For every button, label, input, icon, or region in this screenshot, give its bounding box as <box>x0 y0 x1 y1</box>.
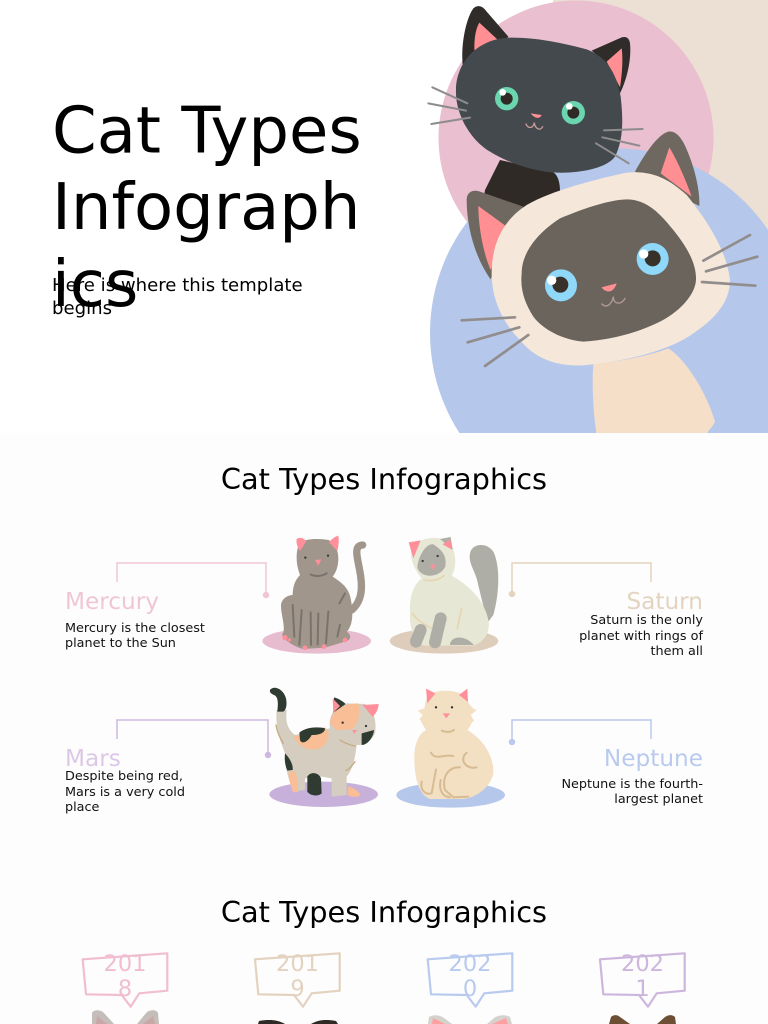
title: Infograph <box>52 171 360 245</box>
label: Mercury: Mercury <box>65 588 159 615</box>
text: Saturn description: Saturn is the only <box>590 613 703 628</box>
text: Mars description: Despite being red, <box>65 769 183 784</box>
blue circle <box>430 148 768 433</box>
connector: Neptune <box>510 720 651 744</box>
label: Mars: Mars <box>65 745 121 772</box>
year bubble: 2019 <box>255 951 340 1007</box>
connector: Mercury <box>117 563 268 598</box>
year bubble: 2020: 0 <box>463 976 477 1002</box>
text: Saturn description: planet with rings of <box>579 629 703 644</box>
connector: Saturn <box>510 563 651 596</box>
black cat <box>428 6 643 213</box>
title: Cat Types <box>52 94 362 168</box>
year bubble: 2019: 9 <box>290 976 305 1002</box>
year bubble: 2018 <box>83 951 167 1007</box>
cat: calico on purple mat <box>269 688 379 807</box>
year bubble: 2021: 202 <box>621 951 664 977</box>
year bubble: 2021: 1 <box>635 976 650 1002</box>
text: Mars description: place <box>65 800 100 815</box>
year bubble: 2018: 201 <box>104 951 146 977</box>
pink circle <box>438 0 714 222</box>
label: Saturn: Saturn <box>626 588 703 615</box>
section heading: cat types: Cat Types Infographics <box>221 462 547 496</box>
cat ears: brown <box>609 1015 676 1024</box>
beige backdrop <box>553 0 768 230</box>
section heading: timeline: Cat Types Infographics <box>221 895 547 929</box>
year bubble: 2018: 8 <box>118 976 132 1002</box>
year bubble: 2020: 202 <box>449 951 491 977</box>
connector: Mars <box>117 720 270 758</box>
text: Mercury description: planet to the Sun <box>65 636 176 651</box>
label: Neptune: Neptune <box>604 745 703 772</box>
title: ics <box>52 248 138 322</box>
cat: cream on blue mat <box>396 689 505 808</box>
year bubble: 2021 <box>600 951 685 1007</box>
text: Mercury description: Mercury is the closest <box>65 621 205 636</box>
siamese cat <box>462 131 757 435</box>
cat ears: pink <box>428 1015 512 1024</box>
hero illustration <box>427 0 768 433</box>
text: Mars description: Mars is a very cold <box>65 785 185 800</box>
text: Neptune description: largest planet <box>614 792 703 807</box>
text: Saturn description: them all <box>650 644 703 659</box>
subtitle: Here is where this template <box>52 275 303 296</box>
subtitle: begins <box>52 298 112 319</box>
cat ears: grey <box>92 1010 159 1024</box>
text: Neptune description: Neptune is the fourth- <box>561 777 703 792</box>
year bubble: 2019: 201 <box>276 951 319 977</box>
cat: grey on pink mat <box>262 536 371 654</box>
cat: white and grey on beige mat <box>390 537 498 654</box>
cat ears: black <box>258 1020 338 1024</box>
year bubble: 2020 <box>428 951 512 1007</box>
